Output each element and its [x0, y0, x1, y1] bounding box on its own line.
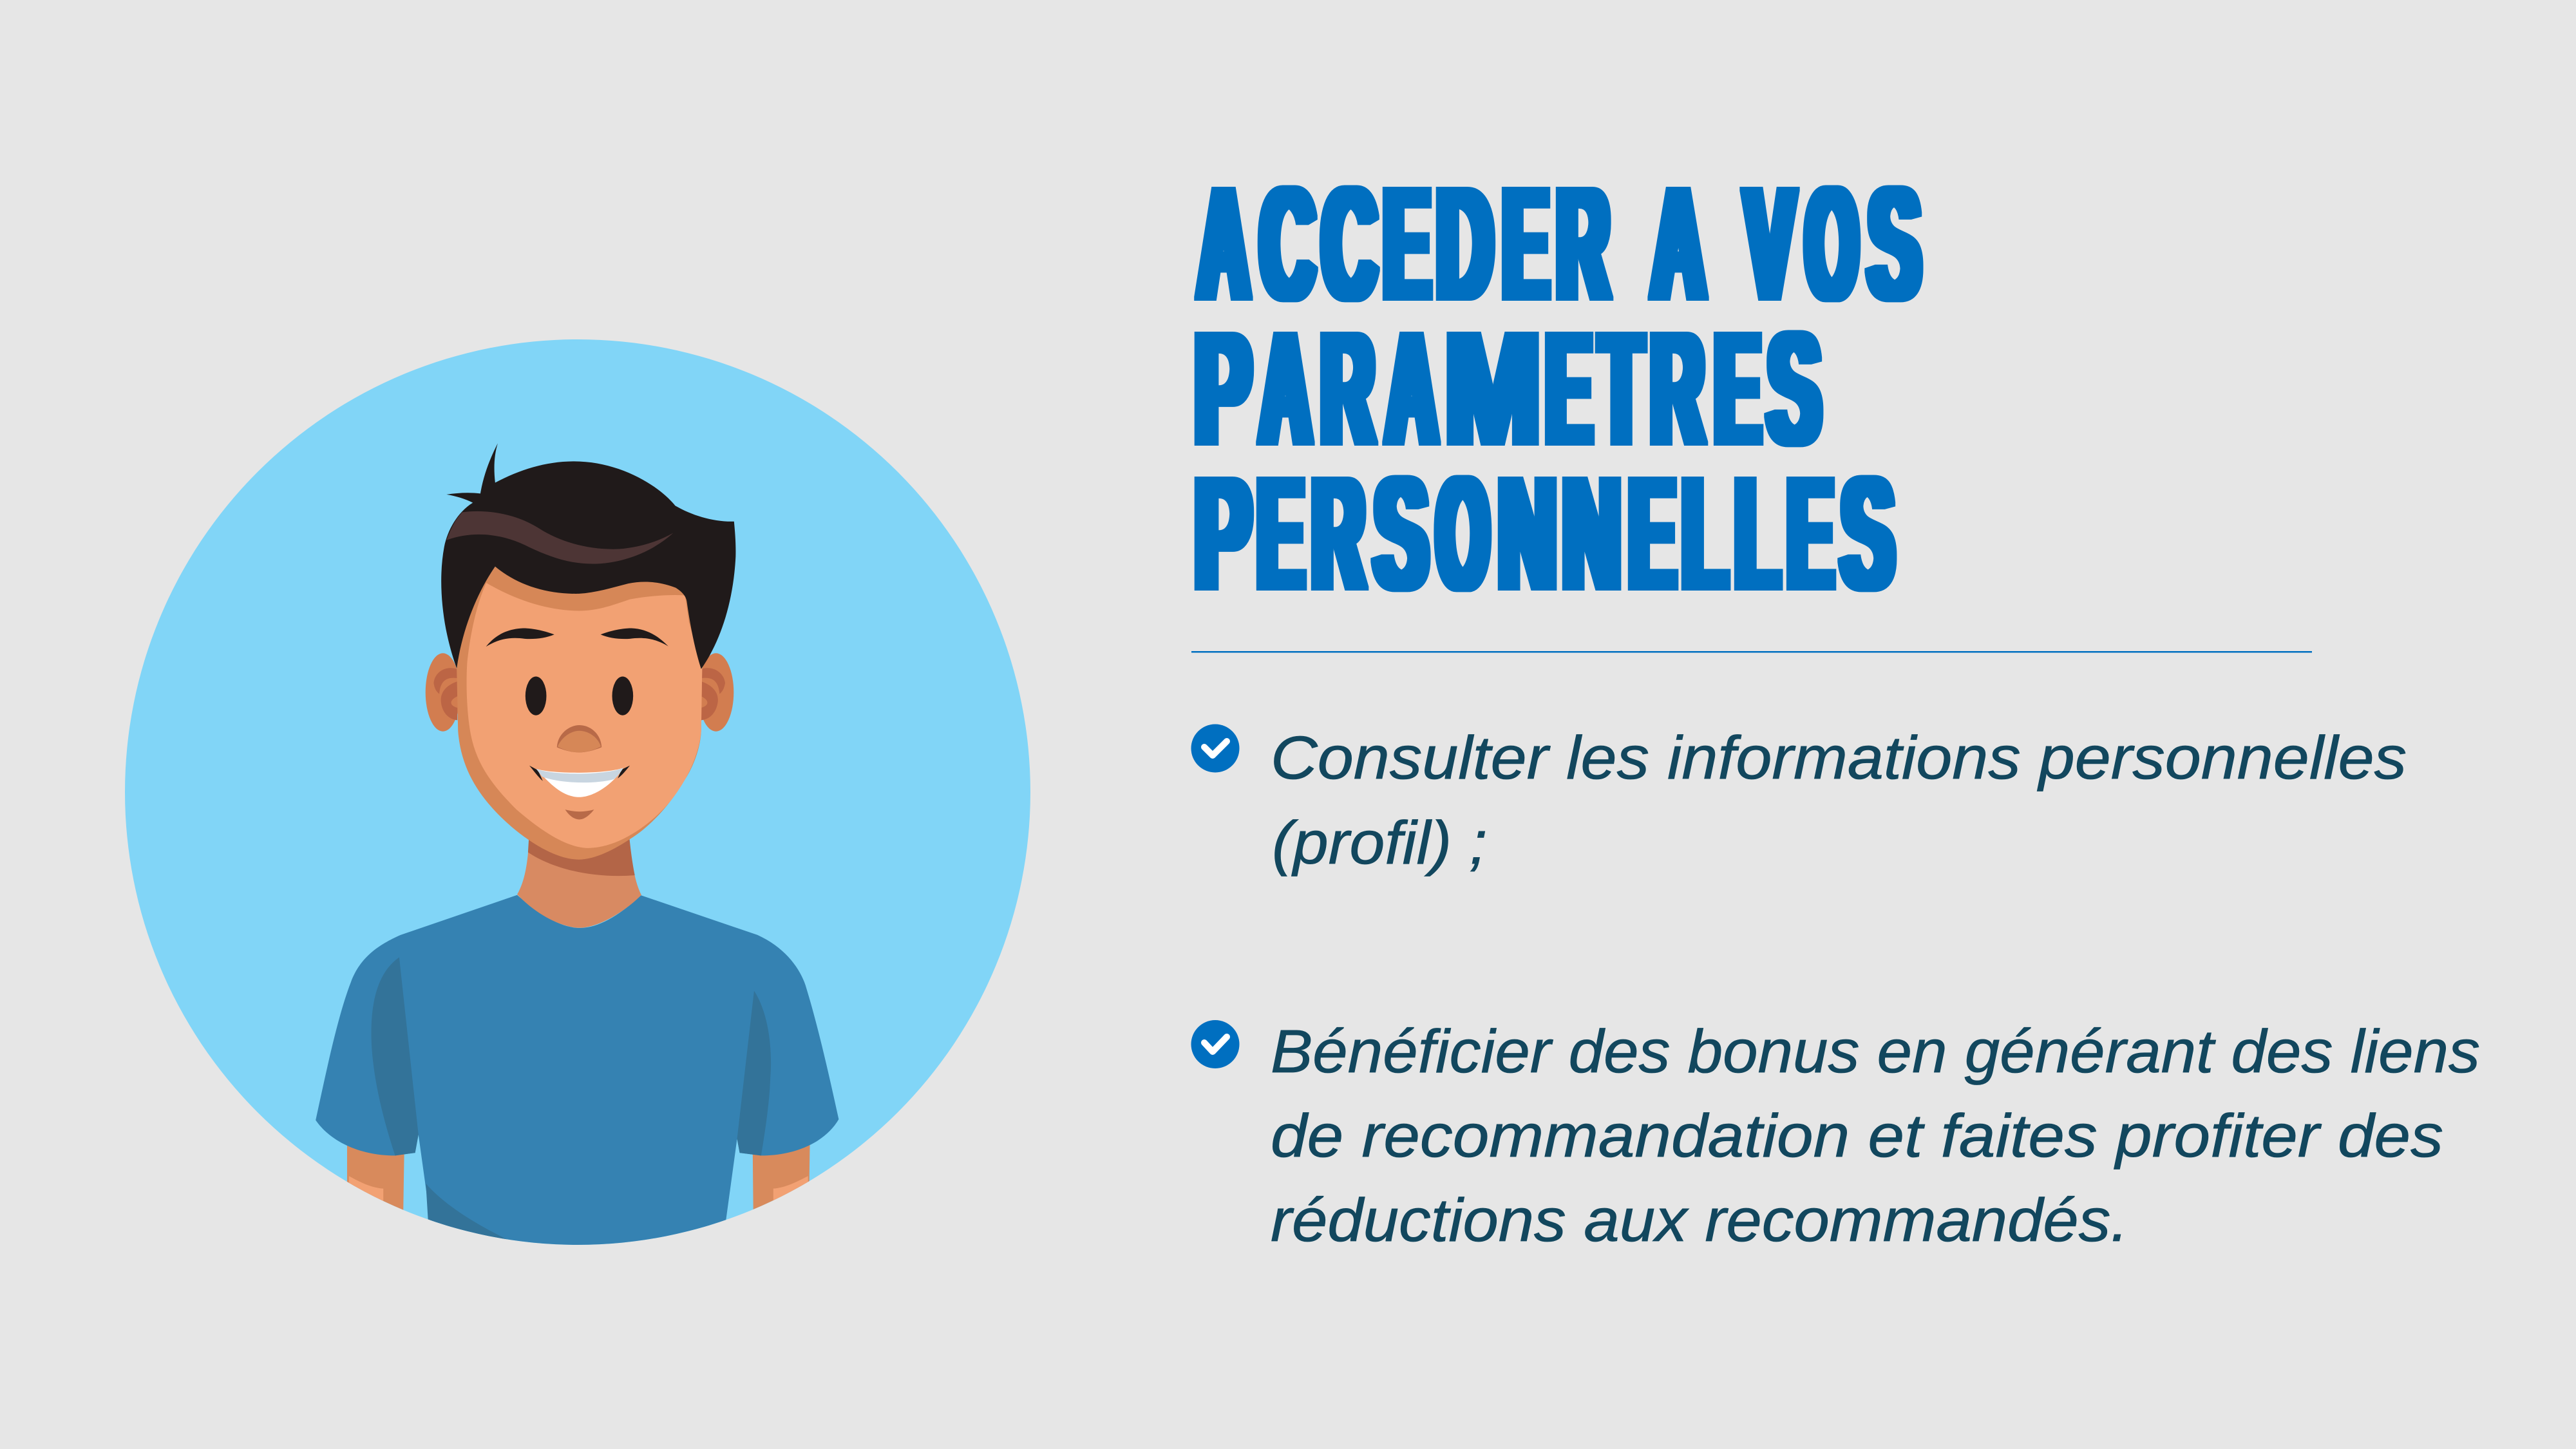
- title: R: [1557, 154, 1609, 333]
- title: T: [1600, 299, 1642, 478]
- title: E: [1503, 154, 1548, 333]
- title: A: [1260, 299, 1311, 478]
- title: L: [1683, 444, 1727, 623]
- title: O: [1437, 444, 1488, 623]
- eyebrows: [486, 629, 668, 647]
- title: O: [1806, 154, 1857, 333]
- avatar illustration in circle: [125, 339, 1030, 1256]
- title: M: [1445, 299, 1540, 478]
- title: L: [1736, 444, 1779, 623]
- title: S: [1768, 299, 1821, 478]
- title: [1195, 154, 1920, 623]
- title: R: [1312, 444, 1364, 623]
- title: R: [1651, 299, 1703, 478]
- body: arms and t-shirt: [316, 895, 838, 1256]
- title: C: [1261, 154, 1314, 333]
- smile: [529, 766, 630, 797]
- light blue circle: [125, 339, 1030, 1245]
- title: E: [1715, 299, 1760, 478]
- chin mark: [565, 810, 594, 819]
- hair highlight: [446, 511, 673, 564]
- bullet text 1: Consulter les informations personnelles: [1271, 724, 2407, 792]
- check icon 1: [1191, 724, 1239, 773]
- infographic canvas: S: [1868, 154, 1920, 333]
- bullet text 1: (profil) ;: [1272, 809, 1487, 877]
- face shadow: [457, 567, 702, 860]
- divider: [1191, 651, 2312, 653]
- bullet text 2: de recommandation et faites profiter des: [1271, 1102, 2443, 1170]
- title: P: [1195, 299, 1251, 478]
- title: E: [1629, 444, 1675, 623]
- title: V: [1745, 154, 1794, 333]
- title: A: [1652, 154, 1703, 333]
- title: N: [1499, 444, 1556, 623]
- left ear: [426, 653, 460, 732]
- hair: [441, 443, 735, 669]
- neck: [517, 839, 641, 928]
- title: D: [1437, 154, 1493, 333]
- right ear: [698, 653, 734, 732]
- title: P: [1195, 444, 1251, 623]
- title: E: [1546, 299, 1591, 478]
- check icon 2: [1191, 1020, 1239, 1068]
- title: A: [1198, 154, 1249, 333]
- title: S: [1841, 444, 1894, 623]
- face: [467, 583, 702, 848]
- title: R: [1321, 299, 1374, 478]
- title: C: [1323, 154, 1376, 333]
- eyes: [526, 677, 633, 715]
- title: E: [1384, 154, 1430, 333]
- title: S: [1374, 444, 1428, 623]
- infographic canvas: [125, 185, 2479, 1245]
- bullet text 2: Bénéficier des bonus en générant des liens: [1271, 1018, 2480, 1086]
- bullet text 2: réductions aux recommandés.: [1271, 1186, 2128, 1255]
- nose: [557, 725, 601, 752]
- title: N: [1563, 444, 1620, 623]
- head: [426, 443, 735, 928]
- neck shadow: [528, 836, 635, 876]
- title: E: [1258, 444, 1303, 623]
- title: E: [1788, 444, 1833, 623]
- title: A: [1387, 299, 1437, 478]
